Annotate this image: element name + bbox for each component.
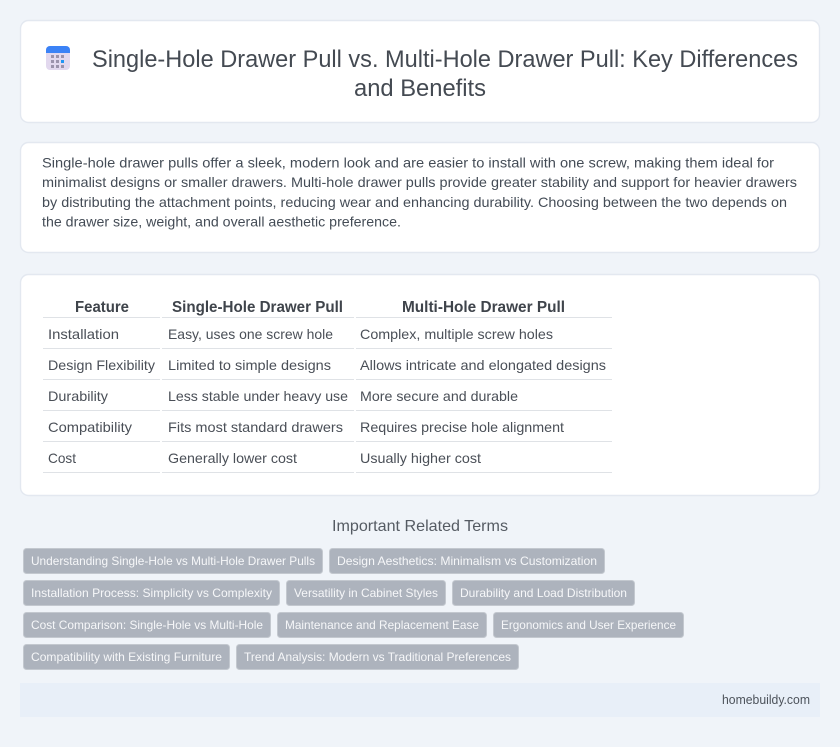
table row: installation: Easy, uses one screw hole (168, 326, 333, 342)
table row: compatibility: Compatibility (48, 419, 132, 435)
table header: Feature (75, 299, 129, 316)
related term tags (24, 548, 684, 670)
table header: Multi-Hole Drawer Pull (402, 299, 565, 316)
table row: compatibility (48, 419, 564, 435)
table row: installation: Installation (48, 326, 119, 342)
table row: design flexibility: Design Flexibility (48, 357, 155, 373)
related term tags: Understanding Single-Hole vs Multi-Hole Drawer Pulls (31, 554, 315, 568)
table row: installation: Complex, multiple screw holes (360, 326, 553, 342)
heading (92, 46, 798, 102)
related term tags: Maintenance and Replacement Ease (285, 618, 479, 632)
table row: durability: Less stable under heavy use (168, 388, 348, 404)
panel: summary (20, 142, 820, 252)
text block: summary: Single-hole drawer pulls offer a sleek, modern look and are easier to install with one screw, making them ideal for (42, 154, 774, 170)
heading: and Benefits (354, 75, 486, 102)
panel: comparison table (20, 274, 820, 496)
related term tags: Durability and Load Distribution (460, 586, 627, 600)
table row: cost (48, 450, 481, 466)
table row: compatibility: Fits most standard drawers (168, 419, 343, 435)
related term tags: Design Aesthetics: Minimalism vs Customization (337, 554, 597, 568)
table row: cost: Cost (48, 450, 76, 466)
related term tags: Installation Process: Simplicity vs Complexity (31, 586, 272, 600)
table header: Single-Hole Drawer Pull (172, 299, 343, 316)
related term tags: Versatility in Cabinet Styles (294, 586, 438, 600)
table row: cost: Usually higher cost (360, 450, 481, 466)
heading: related terms: Important Related Terms (332, 518, 508, 535)
footer: homebuildy.com (722, 693, 810, 707)
table row: design flexibility: Limited to simple designs (168, 357, 331, 373)
icon: calendar (46, 46, 70, 70)
text block: summary: minimalist designs or smaller drawers. Multi-hole drawer pulls provide greater stability and support for heavier drawers (42, 174, 797, 190)
table row: compatibility: Requires precise hole alignment (360, 419, 564, 435)
table row: durability: More secure and durable (360, 388, 518, 404)
heading: Single-Hole Drawer Pull vs. Multi-Hole Drawer Pull: Key Differences (92, 46, 798, 73)
table row: durability (48, 388, 518, 404)
text block: summary (42, 154, 797, 230)
footer (20, 683, 820, 717)
table row: design flexibility: Allows intricate and elongated designs (360, 357, 606, 373)
related term tags: Trend Analysis: Modern vs Traditional Preferences (244, 650, 511, 664)
related term tags: Ergonomics and User Experience (501, 618, 676, 632)
text block: summary: the drawer size, weight, and overall aesthetic preference. (42, 214, 401, 230)
related term tags: Compatibility with Existing Furniture (31, 650, 222, 664)
table row: cost: Generally lower cost (168, 450, 297, 466)
table row: durability: Durability (48, 388, 108, 404)
table row: installation (48, 326, 553, 342)
text block: summary: by distributing the attachment points, reducing wear and enhancing durability. Choosing between the two depends on (42, 194, 787, 210)
panel: title (20, 20, 820, 122)
table header (75, 299, 565, 316)
related term tags: Cost Comparison: Single-Hole vs Multi-Hole (31, 618, 263, 632)
table row: design flexibility (48, 357, 606, 373)
